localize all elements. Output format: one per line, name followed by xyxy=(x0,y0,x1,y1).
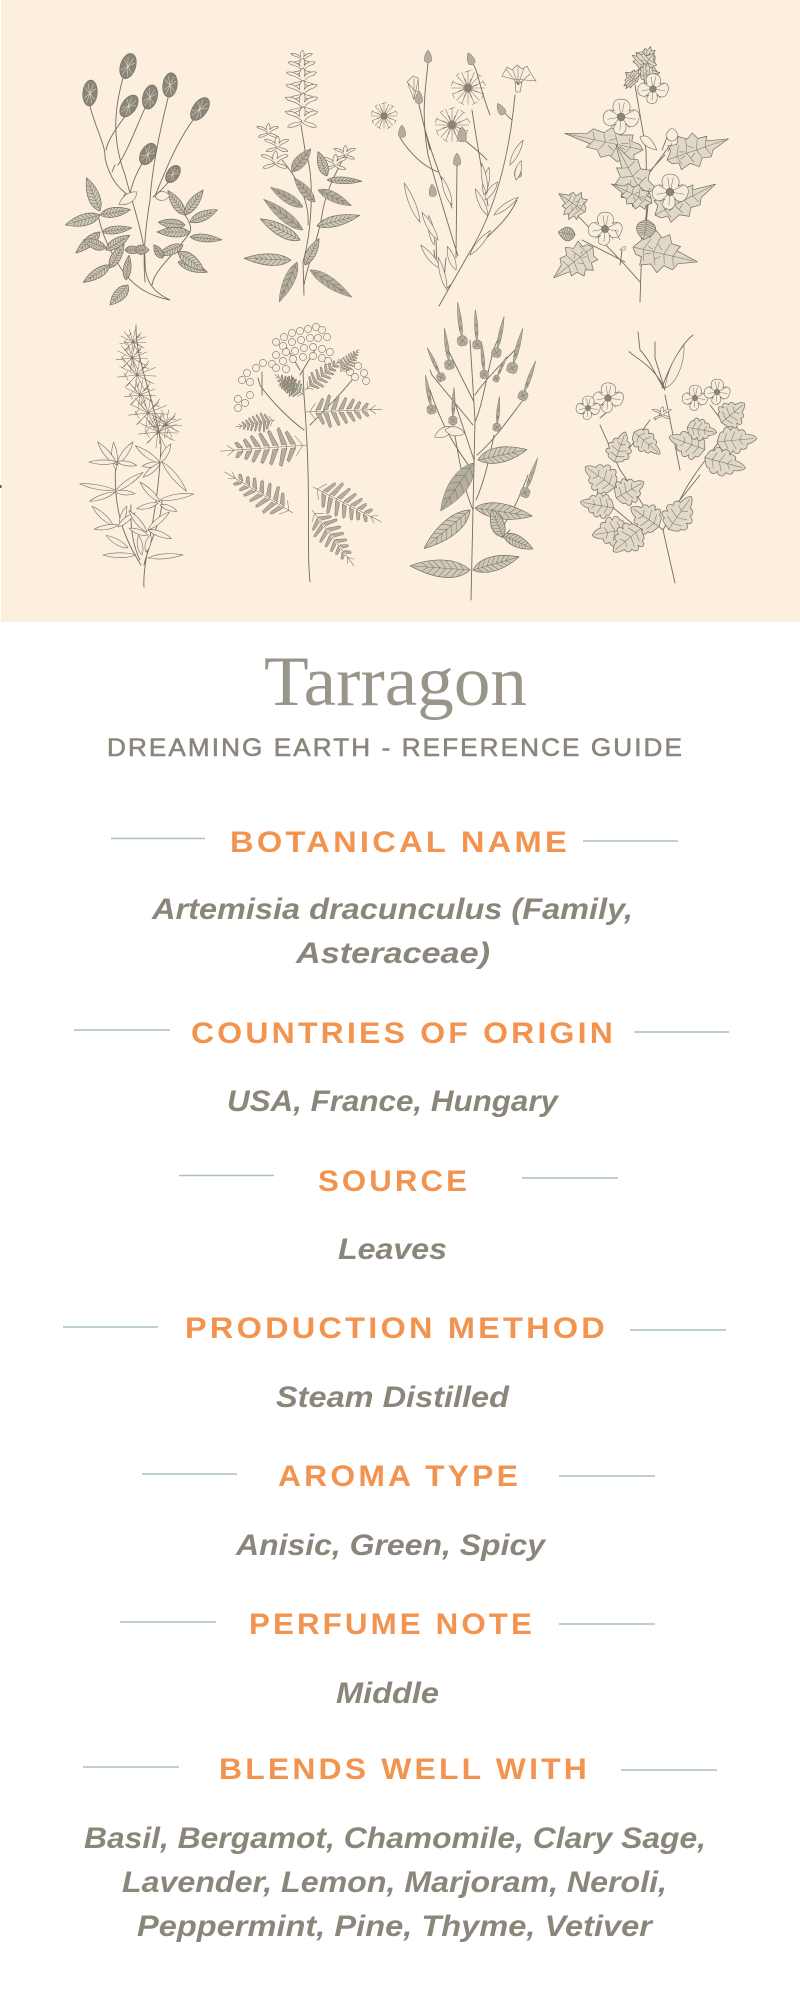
text: botanical name value: Artemisia dracunculus (Family, xyxy=(151,893,633,926)
heading: botanical name: BOTANICAL NAME xyxy=(230,826,570,859)
section: aroma type xyxy=(142,1460,655,1562)
section: botanical name xyxy=(111,826,678,970)
text: botanical name value xyxy=(151,893,633,970)
plant: burnet with oval flower heads xyxy=(64,51,222,309)
section: perfume note xyxy=(120,1608,655,1710)
section: countries of origin xyxy=(74,1017,729,1118)
text: countries value: USA, France, Hungary xyxy=(227,1085,559,1118)
panel: botanical illustrations xyxy=(0,0,800,622)
heading: aroma type: AROMA TYPE xyxy=(278,1460,521,1493)
subtitle: DREAMING EARTH - REFERENCE GUIDE xyxy=(107,734,684,762)
heading: production method: PRODUCTION METHOD xyxy=(185,1312,608,1345)
section: production method xyxy=(63,1312,726,1414)
plant: savory with needle leaves xyxy=(79,325,194,587)
text: blends value: Peppermint, Pine, Thyme, Vetiver xyxy=(137,1910,655,1943)
text: production method value: Steam Distilled xyxy=(276,1381,510,1414)
text: blends value xyxy=(84,1822,706,1943)
heading: countries of origin: COUNTRIES OF ORIGIN xyxy=(191,1017,616,1050)
section: blends well with xyxy=(83,1753,717,1943)
plant: mallow with flowers and serrated leaves xyxy=(543,43,734,302)
text: botanical name value: Asteraceae) xyxy=(295,937,490,970)
text: perfume note value: Middle xyxy=(336,1677,439,1710)
plant: tansy with feathery fronds xyxy=(216,323,390,582)
plant: sage with flower spike xyxy=(244,50,362,304)
text: source value: Leaves xyxy=(338,1233,447,1266)
plant: vervain with spiked inflorescences xyxy=(410,302,542,600)
text: blends value: Lavender, Lemon, Marjoram, Neroli, xyxy=(122,1866,667,1899)
title: Tarragon xyxy=(264,643,527,721)
section: source xyxy=(179,1165,618,1266)
heading: blends well with: BLENDS WELL WITH xyxy=(219,1753,590,1786)
text: blends value: Basil, Bergamot, Chamomile, Clary Sage, xyxy=(84,1822,706,1855)
plant: celandine with lobed leaves and pods xyxy=(576,332,758,583)
text: aroma type value: Anisic, Green, Spicy xyxy=(235,1529,546,1562)
heading: source: SOURCE xyxy=(318,1165,470,1198)
plant: cornflower xyxy=(371,50,536,306)
heading: perfume note: PERFUME NOTE xyxy=(249,1608,535,1641)
